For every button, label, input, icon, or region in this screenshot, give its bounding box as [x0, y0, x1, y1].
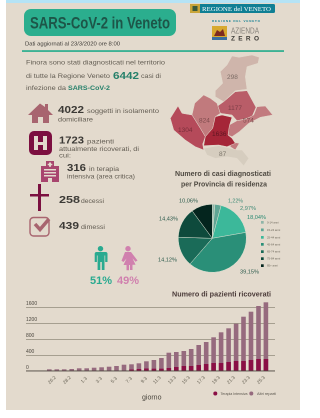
x axis labels: 23.3 [241, 375, 252, 386]
x axis labels: 1.3 [80, 376, 89, 385]
x axis labels: 9.3 [140, 376, 149, 385]
intro text: Finora sono stati diagnosticati nel territorio [26, 60, 166, 66]
stat: discharged [30, 218, 105, 236]
x axis labels: 19.3 [211, 375, 222, 386]
stat: hospitalised: pazienti [87, 140, 114, 146]
pie labels: 2,97% [240, 206, 256, 212]
pie legend: 85+ anni [267, 264, 278, 268]
logo: Azienda Zero: AZIENDA [231, 26, 259, 36]
icon: house [28, 104, 53, 123]
pie legend: 45-64 anni [267, 242, 281, 246]
bar chart title: Numero di pazienti ricoverati [172, 292, 271, 298]
pie chart [178, 204, 246, 272]
stat: hospitalised: attualmente ricoverati, di [59, 147, 139, 153]
pie legend: 15-24 anni [267, 228, 281, 232]
x axis labels: 17.3 [196, 375, 207, 386]
bars: intensive care [129, 359, 268, 371]
pie labels: 14,43% [159, 216, 178, 222]
gender split: 49% [117, 275, 139, 287]
bars: other wards [47, 302, 268, 371]
logo: Azienda Zero [212, 19, 261, 42]
stat: intensive care [41, 161, 135, 182]
intro text: SARS-CoV-2 [68, 85, 110, 92]
title: SARS-CoV-2 in Veneto [30, 14, 170, 32]
icon: hospital H [29, 131, 52, 155]
icon: cross [30, 184, 49, 211]
logo: Azienda Zero: ZERO [231, 36, 259, 42]
bar chart [26, 301, 276, 402]
intro text [26, 60, 166, 92]
gender split: 51% [90, 275, 112, 287]
pie labels: 39,15% [240, 270, 259, 276]
y axis labels [26, 301, 37, 371]
pie chart title: Numero di casi diagnosticati [175, 171, 271, 178]
province: Treviso: 1177 [228, 105, 242, 112]
stat: deaths: 258 [59, 194, 80, 206]
bar legend: Terapia Intensiva [220, 392, 248, 396]
icon: hospital building [41, 161, 59, 182]
pie legend [261, 220, 281, 268]
intro text: infezione da [26, 86, 67, 92]
x axis labels: 7.3 [125, 376, 134, 385]
x axis labels: 26.2 [47, 375, 58, 386]
stat: deaths: decessi [81, 199, 104, 205]
logo: Regione del Veneto [190, 4, 275, 13]
stat: home isolation: soggetti in isolamento [87, 109, 160, 115]
icon: woman [122, 246, 138, 270]
intro text: di tutte la Regione Veneto [26, 74, 111, 80]
icon: man [95, 246, 108, 270]
x axis labels: 3.3 [95, 376, 104, 385]
stat: deaths [30, 184, 104, 211]
stat: intensive care: in terapia [89, 167, 120, 173]
stat: hospitalised [29, 131, 139, 160]
x axis labels: 28.2 [62, 375, 73, 386]
pie chart title: per Provincia di residenza [181, 182, 267, 188]
pie legend: 0-14 anni [267, 220, 279, 224]
pie labels [158, 198, 266, 276]
pie labels: 1,22% [228, 198, 243, 204]
pie labels: 14,12% [158, 258, 177, 264]
bar legend [213, 392, 276, 396]
pie legend: 75-84 anni [267, 257, 281, 261]
province: Padova: 1636 [212, 131, 227, 138]
x axis labels: 15.3 [181, 375, 192, 386]
y axis labels: 1200 [26, 317, 37, 323]
icon: check box [30, 218, 49, 236]
stat: discharged: 439 [59, 220, 79, 232]
x axis labels [47, 375, 267, 386]
province: Verona: 1304 [178, 127, 193, 134]
stat: hospitalised: 1723 [59, 134, 84, 146]
date note: Dati aggiornati al 23/3/2020 ore 8:00 [25, 42, 120, 48]
y axis labels: 0 [26, 365, 29, 371]
title [24, 9, 176, 36]
bar legend: Altri reparti [257, 392, 276, 396]
province: Rovigo: 87 [219, 151, 227, 158]
y axis labels: 800 [26, 333, 35, 339]
y axis labels: 400 [26, 349, 35, 355]
map of Veneto by province [170, 55, 273, 166]
logo: Regione del Veneto: REGIONE del VENETO [202, 7, 272, 13]
x axis title: giorno [142, 394, 162, 402]
province: Belluno: 298 [227, 74, 238, 81]
pie labels: 10,06% [179, 198, 198, 204]
pie legend: 25-44 anni [267, 235, 281, 239]
stat: home isolation [28, 104, 160, 124]
stat: discharged: dimessi [81, 225, 105, 231]
stat: home isolation: 4022 [58, 104, 84, 116]
stat: home isolation: domiciliare [58, 118, 94, 124]
y axis labels: 1600 [26, 301, 37, 307]
pie labels: 18,04% [247, 215, 266, 221]
province: Vicenza: 824 [199, 118, 210, 124]
province: Venezia: 574 [243, 118, 254, 124]
x axis labels: 11.3 [152, 375, 163, 386]
intro text: 6442 [113, 70, 139, 82]
pie chart title [175, 171, 271, 188]
stat: hospitalised: cui: [59, 154, 71, 160]
x axis labels: 13.3 [167, 375, 178, 386]
gender split [90, 246, 139, 287]
x axis labels: 21.3 [226, 375, 237, 386]
pie legend: 65-74 anni [267, 250, 281, 254]
intro text: casi di [141, 74, 161, 80]
logo: Azienda Zero: REGIONE DEL VENETO [212, 19, 261, 23]
x axis labels: 25.3 [256, 375, 267, 386]
stat: intensive care: 316 [67, 162, 86, 174]
stat: intensive care: intensiva (area critica) [67, 174, 135, 180]
x axis labels: 5.3 [110, 376, 119, 385]
